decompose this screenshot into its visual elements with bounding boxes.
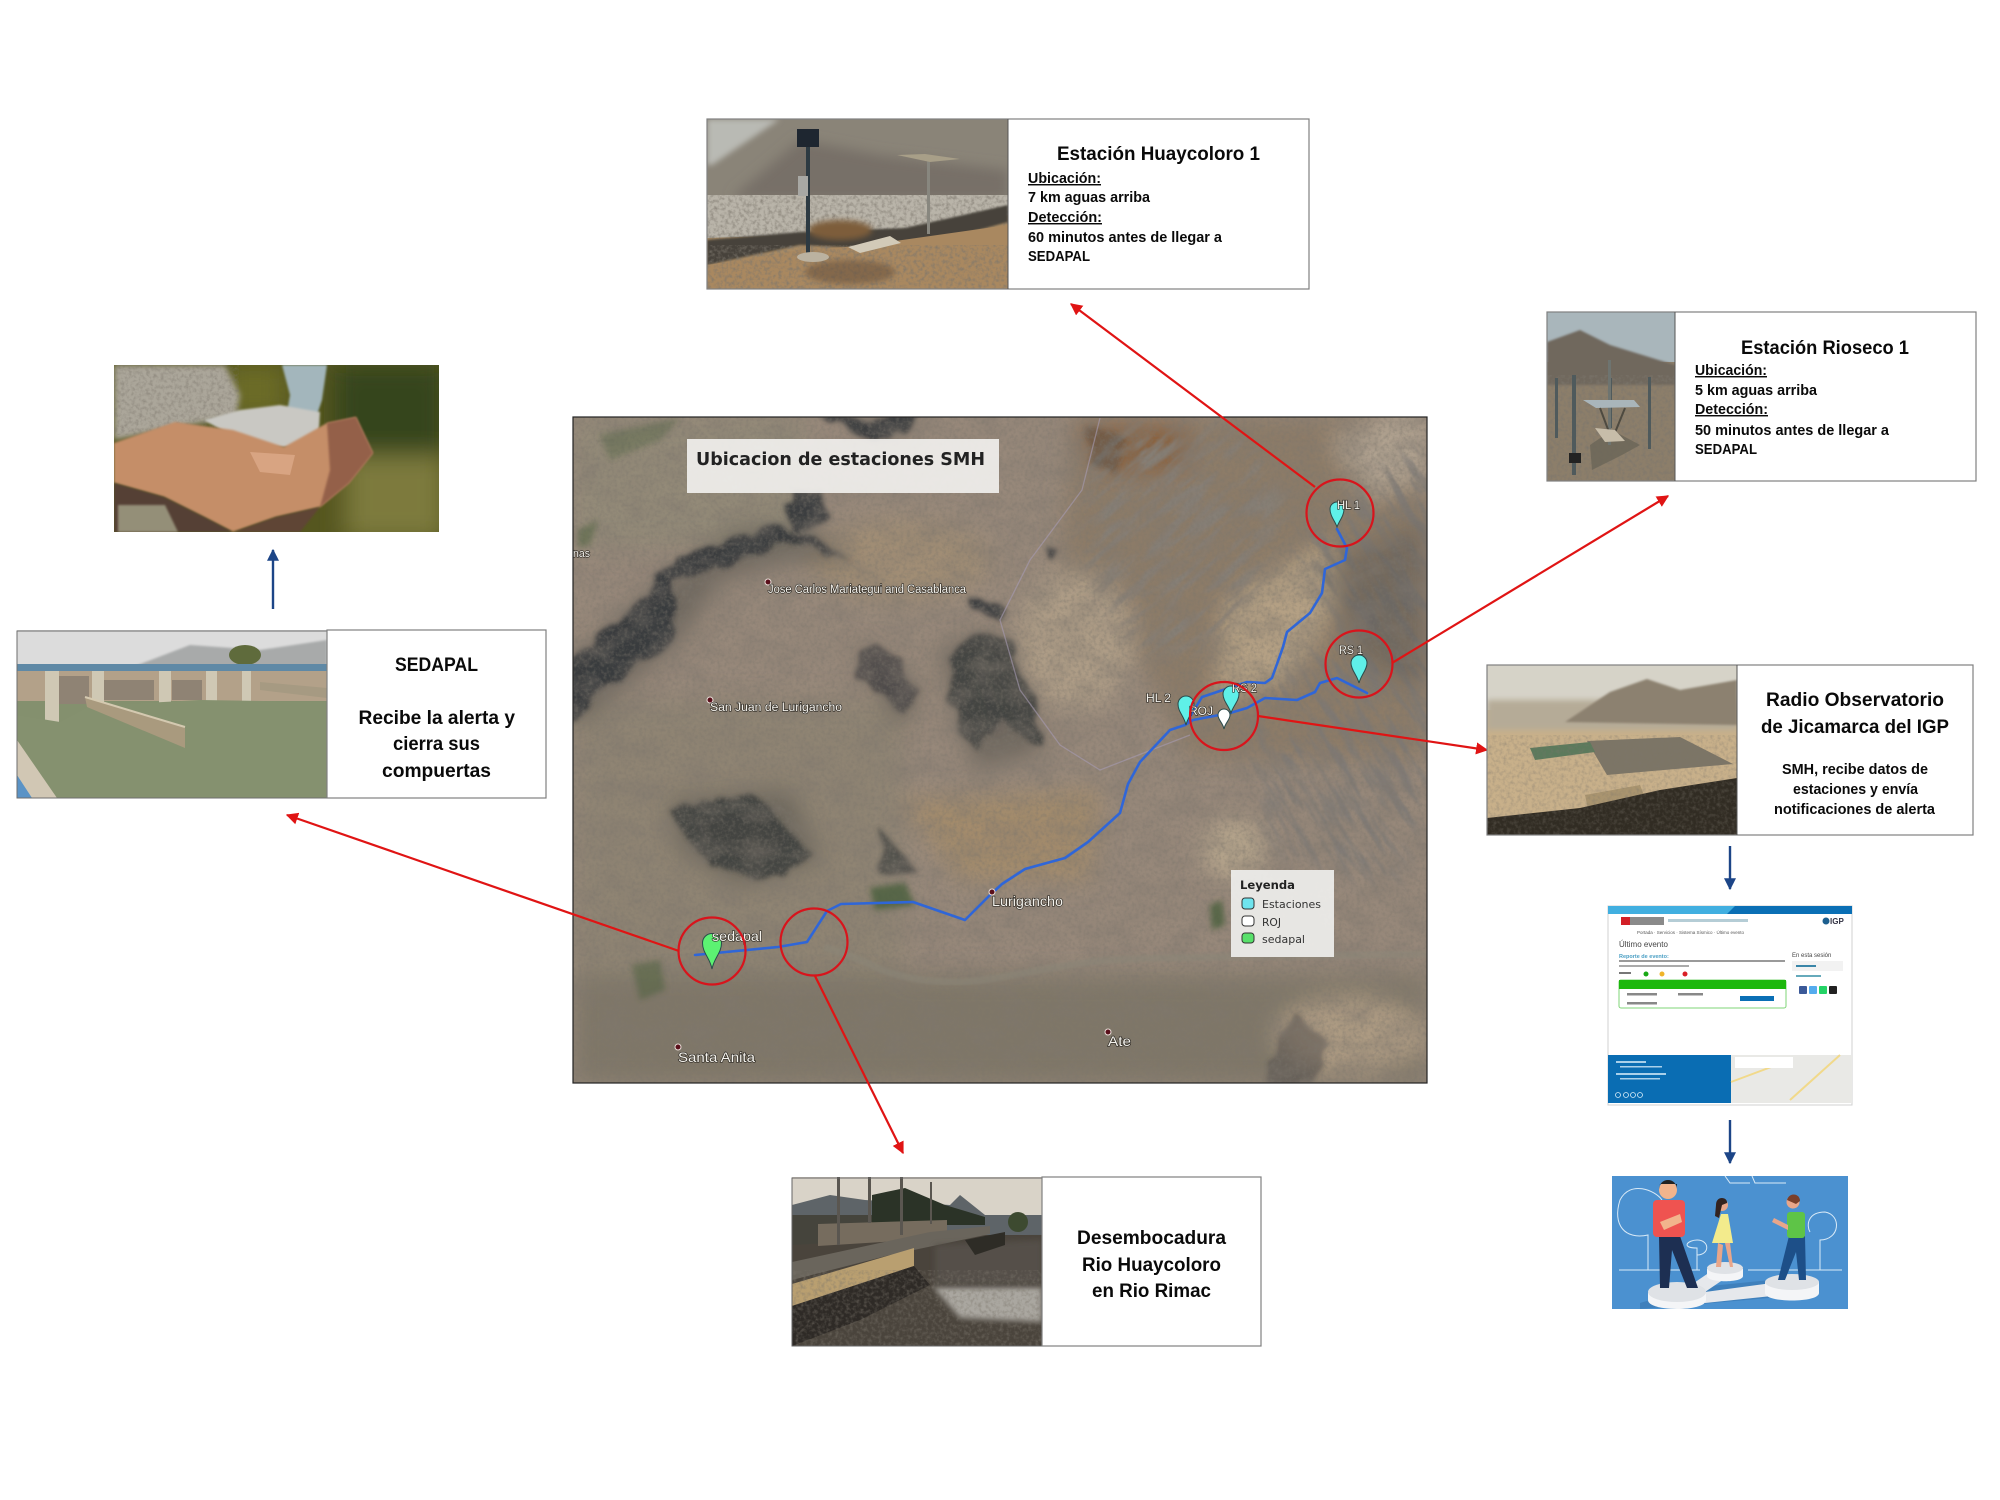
place labels: Ate (1108, 1033, 1131, 1049)
text: Jicamarca details: estaciones y envía (1793, 782, 1919, 798)
text box: SEDAPAL (327, 630, 546, 798)
place labels: Lurigancho (992, 893, 1063, 909)
river: Rio Huaycoloro (695, 529, 1367, 955)
station markers: RS 2 (1232, 681, 1257, 695)
website screenshot: Ultimo evento: En esta sesión (1792, 953, 1831, 959)
red location circles (678, 480, 1392, 984)
text: Rioseco details: Ubicación: (1695, 363, 1767, 379)
text box: SEDAPAL: cierra sus (393, 733, 480, 755)
panel: Radio Observatorio de Jicamarca (1487, 665, 1973, 835)
arrow: Radio Observatorio to website (1729, 846, 1731, 889)
website screenshot: Ultimo evento: IGP (1830, 917, 1844, 926)
map legend (1231, 870, 1334, 957)
text: Jicamarca details: SMH, recibe datos de (1782, 762, 1928, 778)
place labels: San Juan de Lurigancho (710, 702, 842, 714)
panel: Estacion Rioseco 1 (1547, 312, 1976, 481)
map legend: sedapal (1262, 933, 1305, 946)
arrow: RS1 to Estacion Rioseco (1392, 496, 1668, 663)
place labels: Jose Carlos Mariategui and Casablanca (768, 584, 967, 596)
photo: river mouth (792, 1177, 1042, 1346)
text: Huaycoloro details: Ubicación: (1028, 171, 1101, 187)
text: Huaycoloro details: SEDAPAL (1028, 249, 1090, 265)
station markers: RS 1 (1339, 643, 1363, 657)
station markers: HL 1 (1337, 498, 1360, 512)
map title box: Ubicacion de estaciones SMH (696, 449, 985, 470)
station markers (702, 498, 1367, 969)
text: Huaycoloro details: Estación Huaycoloro 1 (1057, 143, 1260, 165)
text box: SEDAPAL: Recibe la alerta y (358, 707, 515, 729)
map legend: Leyenda (1240, 878, 1295, 892)
place labels: nas (573, 548, 590, 560)
arrow: ROJ to Radio Observatorio (1258, 716, 1487, 750)
text: Jicamarca details: de Jicamarca del IGP (1761, 716, 1949, 738)
text: Rioseco details: SEDAPAL (1695, 442, 1757, 458)
station markers: sedapal (712, 928, 762, 944)
arrow: SEDAPAL to water (272, 550, 274, 609)
website screenshot: Ultimo evento: Reporte de evento: (1619, 954, 1669, 960)
text box: SEDAPAL: SEDAPAL (395, 654, 478, 676)
text: Jicamarca details: Radio Observatorio (1766, 689, 1944, 711)
website screenshot: Ultimo evento: Portada · Servicios · Sistema Sísmico · Último evento (1637, 929, 1745, 935)
panel: SEDAPAL (17, 630, 546, 798)
text: Rioseco details: Estación Rioseco 1 (1741, 337, 1909, 359)
panel: Desembocadura Rio Huaycoloro (792, 1177, 1261, 1346)
text: Jicamarca details (1761, 689, 1949, 818)
text box: Desembocadura: Rio Huaycoloro (1082, 1254, 1221, 1276)
arrow: sedapal marker to SEDAPAL panel (287, 815, 679, 951)
map: station locations (572, 416, 1428, 1084)
map title box (687, 439, 999, 493)
text: Huaycoloro details: 60 minutos antes de llegar a (1028, 230, 1223, 246)
arrow: HL1 to Estacion Huaycoloro (1071, 304, 1315, 487)
text box: Desembocadura (1042, 1177, 1261, 1346)
text: Rioseco details: 50 minutos antes de llegar a (1695, 423, 1890, 439)
text box: Desembocadura: en Rio Rimac (1092, 1280, 1211, 1302)
station markers: HL 2 (1146, 691, 1171, 705)
text: Rioseco details: 5 km aguas arriba (1695, 383, 1818, 399)
text box: Desembocadura: Desembocadura (1077, 1227, 1226, 1249)
text: Rioseco details: Detección: (1695, 402, 1768, 418)
illustration: people with phones (1612, 1176, 1848, 1309)
website screenshot: Ultimo evento (1608, 906, 1852, 1105)
arrow: confluence to Desembocadura (815, 976, 903, 1153)
station markers: ROJ (1189, 704, 1213, 718)
terrain tone areas (574, 418, 1426, 1082)
place labels: Santa Anita (678, 1049, 755, 1065)
photo: Huaycoloro station (707, 119, 1008, 289)
map legend: ROJ (1262, 916, 1281, 929)
website screenshot: Ultimo evento: Último evento (1619, 940, 1668, 949)
panel: Estacion Huaycoloro 1 (707, 119, 1309, 289)
map legend: Estaciones (1262, 898, 1321, 911)
place labels (573, 548, 1131, 1065)
text: Huaycoloro details (1028, 143, 1260, 265)
text: Huaycoloro details: Detección: (1028, 210, 1102, 226)
text box: SEDAPAL: compuertas (382, 760, 491, 782)
photo: SEDAPAL gates (17, 630, 327, 798)
photo: hands and water (114, 365, 445, 540)
photo: Jicamarca observatory (1487, 665, 1737, 835)
text: Jicamarca details: notificaciones de alerta (1774, 802, 1936, 818)
text: Rioseco details (1695, 337, 1909, 458)
arrow: website to users (1729, 1120, 1731, 1163)
text: Huaycoloro details: 7 km aguas arriba (1028, 190, 1151, 206)
photo: Rioseco station (1547, 312, 1675, 481)
